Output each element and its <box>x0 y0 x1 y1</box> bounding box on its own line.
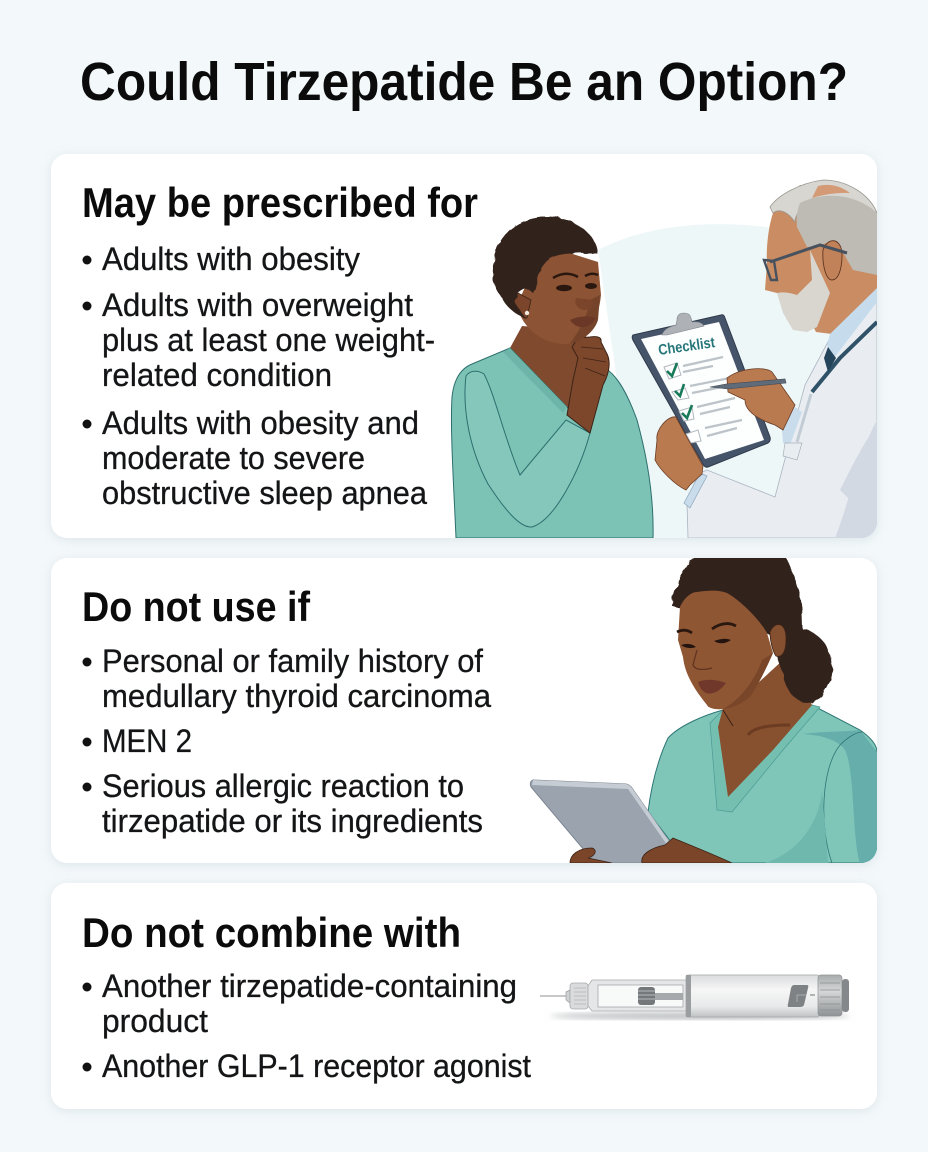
bullet list: prescribed for: Adults with overweight <box>102 287 413 323</box>
bullet list: contraindications <box>82 643 491 839</box>
illustration: patient and doctor with checklist <box>451 180 877 538</box>
checklist rows <box>664 357 742 443</box>
title: Could Tirzepatide Be an Option? <box>80 52 848 112</box>
bullet list: combinations: product <box>102 1003 208 1039</box>
bullet list: combinations <box>82 968 531 1084</box>
bullet list: combinations: Another tirzepatide-containing <box>102 968 517 1004</box>
tablet <box>530 780 673 863</box>
patient <box>451 217 653 538</box>
hair <box>673 545 832 703</box>
panel: do not use if <box>51 545 877 863</box>
clipboard <box>632 313 770 467</box>
bullet list: contraindications: Personal or family history of <box>102 643 483 679</box>
doctor neck <box>814 262 877 334</box>
hands <box>570 838 732 863</box>
doctor <box>632 180 877 538</box>
bullet list: prescribed for: plus at least one weight- <box>102 322 435 358</box>
bullet list: combinations: Another GLP-1 receptor agonist <box>102 1048 531 1084</box>
bullet list: contraindications: tirzepatide or its ingredients <box>102 803 483 839</box>
bullet list: prescribed for: related condition <box>102 357 332 393</box>
bullet list: contraindications: medullary thyroid carcinoma <box>102 678 491 714</box>
panel: do not combine with <box>51 883 877 1109</box>
doctor head <box>765 185 848 332</box>
bullet list: prescribed for: Adults with obesity and <box>102 405 419 441</box>
heading: do not combine with: Do not combine with <box>82 909 461 956</box>
panel: may be prescribed for <box>51 154 877 538</box>
face <box>678 591 773 709</box>
background blob <box>598 224 830 538</box>
shirt <box>648 705 877 863</box>
icon: injection pen <box>540 975 850 1020</box>
bullet list: contraindications: Serious allergic reaction to <box>102 768 464 804</box>
illustration: woman reading tablet <box>530 545 877 863</box>
doctor hands and pen <box>655 417 703 490</box>
collar <box>827 288 877 358</box>
heading: do not use if: Do not use if <box>82 583 311 630</box>
checklist label: Checklist <box>657 334 716 359</box>
neck and chest <box>718 660 812 797</box>
bullet list: contraindications: MEN 2 <box>102 723 192 759</box>
forearm and hand <box>567 337 609 433</box>
bullet list: prescribed for: Adults with obesity <box>102 241 360 277</box>
bullet list: prescribed for: moderate to severe <box>102 440 365 476</box>
heading: may be prescribed for: May be prescribed for <box>82 179 478 226</box>
bullet list: prescribed for <box>82 241 435 511</box>
bullet list: prescribed for: obstructive sleep apnea <box>102 475 427 511</box>
